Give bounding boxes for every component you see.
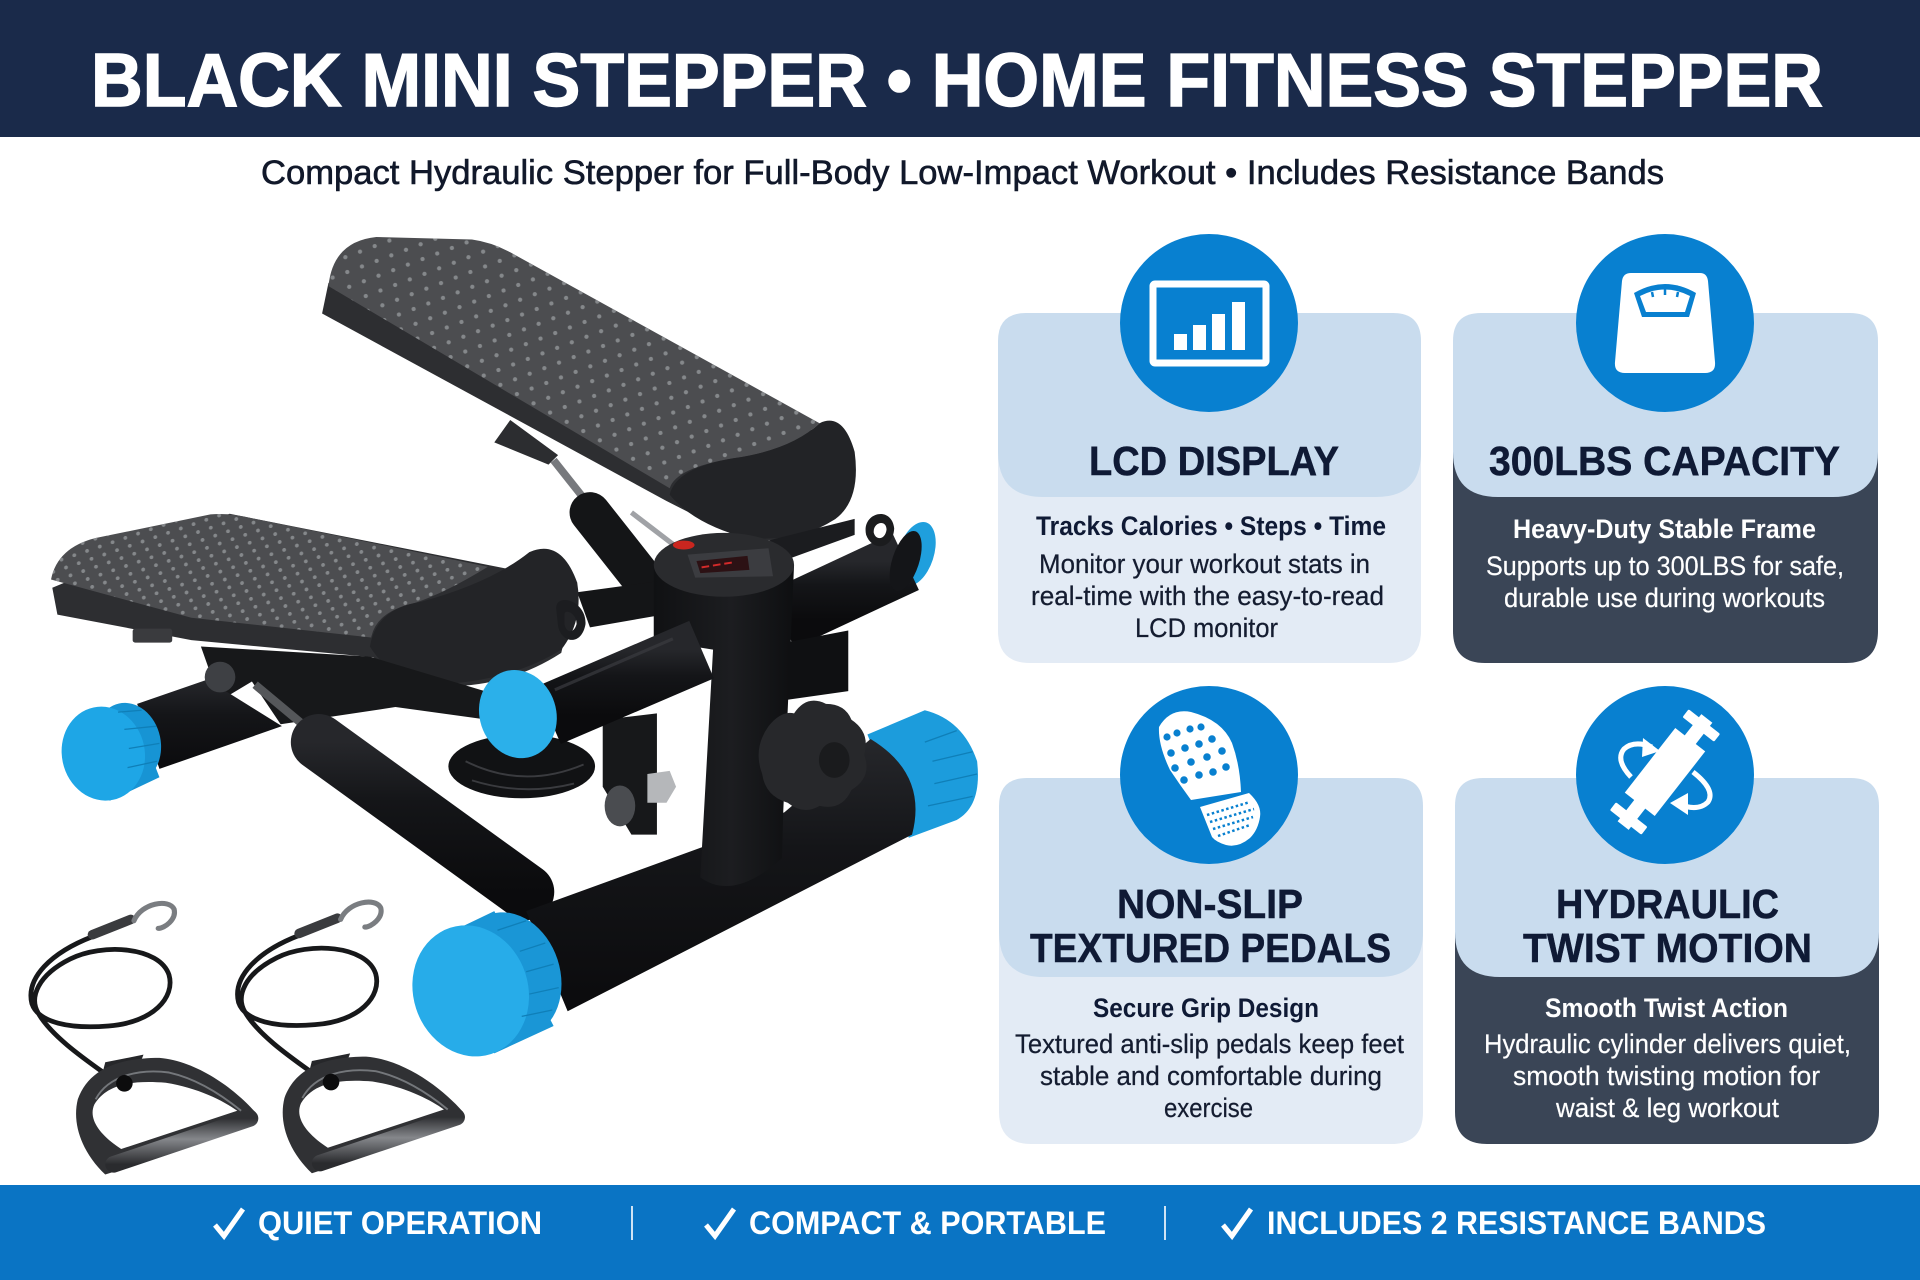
text block: exercise [1164,1093,1253,1123]
text block: Textured anti-slip pedals keep feet [1015,1029,1404,1059]
text block: Heavy-Duty Stable Frame [1513,514,1816,544]
text block [1031,511,1386,643]
resistance band right [238,902,463,1173]
lower pedal linkage [201,646,488,724]
coiled cable [448,734,595,798]
text block [1486,514,1844,613]
text block: real-time with the easy-to-read [1031,581,1384,611]
text block: LCD monitor [1135,613,1278,643]
panel: non-slip textured pedals [999,686,1423,1144]
cross member behind [577,581,663,627]
footer bar [0,1185,1920,1280]
icon: LCD monitor [1120,234,1298,412]
text block [1484,993,1851,1123]
rear hydraulic cylinder [494,420,677,573]
heading [1523,881,1812,971]
heading: 300LBS CAPACITY [1489,438,1840,484]
icon: shoe sole [1120,686,1298,864]
product photo: mini stepper with bands [31,237,978,1175]
adjustment knob [759,701,867,810]
text block: waist & leg workout [1555,1093,1779,1123]
rear right tube with blue cap [753,514,943,701]
text block: Smooth Twist Action [1545,993,1788,1023]
feature: quiet operation: QUIET OPERATION [258,1205,542,1241]
heading: HYDRAULIC [1556,881,1779,927]
text block: Monitor your workout stats in [1039,549,1370,579]
heading: TWIST MOTION [1523,925,1812,971]
icon: twisting cylinder [1576,686,1754,864]
text block: smooth twisting motion for [1513,1061,1820,1091]
panel: hydraulic twist motion [1455,686,1879,1144]
rear left tube with blue cap [53,662,282,808]
upper pedal [322,237,856,540]
front blue end cap [396,899,577,1072]
resistance band left [31,903,256,1175]
bracket and bolt [603,713,676,835]
panel: 300LBS capacity [1453,234,1878,663]
heading [1030,881,1391,971]
heading: LCD DISPLAY [1089,438,1339,484]
text block [1015,993,1404,1123]
feature: includes bands: INCLUDES 2 RESISTANCE BANDS [1267,1205,1766,1241]
icon: weighing scale [1576,234,1754,412]
title: BLACK MINI STEPPER • HOME FITNESS STEPPER [91,38,1823,122]
front arm with blue ball end [468,600,702,768]
text block: Supports up to 300LBS for safe, [1486,551,1844,581]
feature: compact and portable: COMPACT & PORTABLE [749,1205,1106,1241]
right blue end cap [867,710,978,838]
lower pedal [51,514,579,687]
front hydraulic cylinder [255,685,526,892]
display head [654,533,794,597]
text block: Secure Grip Design [1093,993,1319,1023]
heading: TEXTURED PEDALS [1030,925,1391,971]
text block: Hydraulic cylinder delivers quiet, [1484,1029,1851,1059]
header banner [0,0,1920,137]
central column [654,565,794,886]
subtitle: Compact Hydraulic Stepper for Full-Body Low-Impact Workout • Includes Resistance Bands [261,154,1664,192]
text block: stable and comfortable during [1040,1061,1382,1091]
front base tube [526,739,916,1011]
heading: NON-SLIP [1117,881,1303,927]
text block: Tracks Calories • Steps • Time [1036,511,1386,541]
panel: LCD display [998,234,1421,663]
text block: durable use during workouts [1504,583,1825,613]
